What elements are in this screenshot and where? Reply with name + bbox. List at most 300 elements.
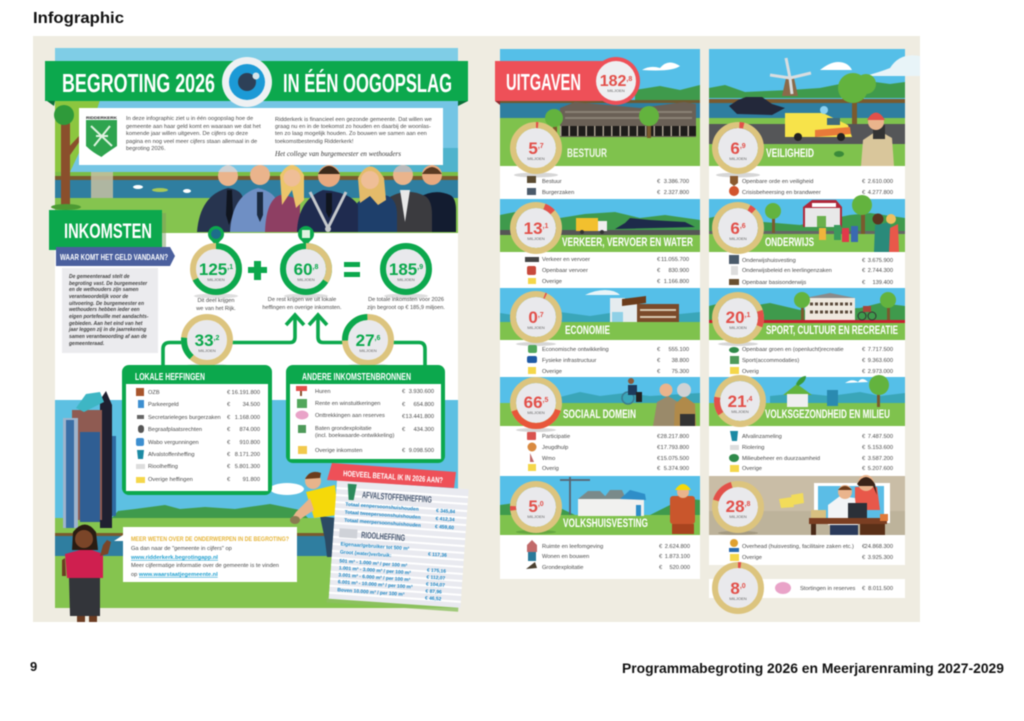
- trees: [765, 195, 872, 234]
- table rows andere inkomstenbronnen: [296, 386, 434, 454]
- panel: andere inkomstenbronnen: [286, 365, 445, 463]
- table: volksgezondheid: 5.207.600: [868, 466, 893, 472]
- donut: volkshuisvesting: MILJOEN: [527, 514, 545, 519]
- panel: sociaal domein: [500, 377, 700, 476]
- table: volkshuisvesting: Wonen en bouwen: [542, 554, 589, 560]
- table rows andere inkomstenbronnen: €: [402, 427, 406, 433]
- table rows andere inkomstenbronnen: (incl. boekwaarde-ontwikkeling): [315, 433, 394, 439]
- illustration: tower: [63, 391, 116, 528]
- panel: lokale heffingen: LOKALE HEFFINGEN: [135, 372, 205, 383]
- donut: 60,8: [283, 246, 329, 298]
- table: bestuur: €: [657, 179, 661, 185]
- subheading ribbon: [56, 247, 175, 266]
- text block: gemeenteraad: De gemeenteraad stelt de: [69, 274, 130, 280]
- table rows lokale heffingen: €: [227, 477, 231, 483]
- notepad: hoeveel betaal ik: [326, 463, 469, 612]
- notepad: hoeveel betaal ik: € 459,60: [435, 524, 454, 531]
- table rows lokale heffingen: 910.800: [239, 440, 260, 446]
- table: verkeer: €: [657, 268, 661, 274]
- donut: volksgezondheid: [717, 378, 763, 424]
- donut: verkeer: 13: [524, 219, 543, 238]
- table: verkeer: Openbaar vervoer: [542, 268, 588, 274]
- red ribbon: [327, 463, 456, 488]
- table: bestuur: Bestuur: [542, 179, 562, 185]
- donut: onderwijs: 6: [730, 219, 740, 238]
- intro text left: begroting 2026.: [126, 146, 166, 152]
- windmill: [770, 58, 811, 96]
- donut: economie: [513, 294, 559, 346]
- table: volksgezondheid: Milieubeheer en duurzaamheid: [742, 456, 820, 462]
- table: sport: €: [862, 369, 866, 375]
- table rows lokale heffingen: [136, 388, 260, 483]
- donut: 125,1: ,1: [227, 264, 233, 271]
- illustration: woman: [62, 524, 111, 622]
- callout: more information: Meer cijfermatige informatie over de gemeente is te vinden: [131, 563, 279, 569]
- table: volkshuisvesting: 2.624.800: [665, 544, 690, 550]
- table rows lokale heffingen: OZB: [148, 390, 160, 396]
- table rows lokale heffingen: Rioolheffing: [148, 464, 178, 470]
- notepad: hoeveel betaal ik: 6.001 m³ - 10.000 m³ / per 100 m³: [338, 579, 413, 591]
- text block: gemeenteraad: jaar leggen zij in de jaarrekening: [68, 327, 146, 333]
- donut: volksgezondheid: MILJOEN: [731, 409, 749, 414]
- text block: gemeenteraad: verantwoordelijk voor de: [69, 294, 128, 300]
- table: overhead: 3.925.300: [868, 555, 893, 561]
- table: verkeer: Verkeer en vervoer: [542, 257, 590, 263]
- panel: volksgezondheid en milieu: VOLKSGEZONDHEID EN MILIEU: [765, 407, 890, 421]
- table rows lokale heffingen: €: [227, 402, 231, 408]
- donut: sociaal domein: [513, 380, 559, 432]
- panel: veiligheid: VEILIGHEID: [766, 146, 814, 160]
- table rows andere inkomstenbronnen: Huren: [315, 389, 330, 395]
- table: volksgezondheid: €: [862, 456, 866, 462]
- donut: 27,6: [345, 317, 391, 368]
- caption: lokale heffingen: De rest krijgen we uit lokale: [268, 297, 336, 303]
- inkomsten banner: INKOMSTEN: [64, 220, 152, 243]
- panel: veiligheid: [709, 49, 920, 199]
- table: volksgezondheid: €: [862, 434, 866, 440]
- heading: in een oogopslag: IN ÉÉN OOGOPSLAG: [283, 68, 452, 98]
- text block: gemeenteraad: [62, 268, 158, 353]
- table: volkshuisvesting: 520.000: [669, 565, 690, 571]
- donut: veiligheid: 6: [730, 139, 740, 158]
- donut: economie: 0: [528, 308, 538, 327]
- table rows andere inkomstenbronnen: 434.300: [413, 427, 434, 433]
- notepad: hoeveel betaal ik: € 104,07: [426, 581, 445, 589]
- table: volksgezondheid: €: [862, 466, 866, 472]
- intro text right: Het college van burgemeester en wethouders: [274, 150, 401, 158]
- equals sign: [344, 262, 360, 277]
- red ribbon: HOEVEEL BETAAL IK IN 2026 AAN?: [343, 469, 443, 485]
- donut: volksgezondheid: ,4: [747, 396, 752, 403]
- table: onderwijs: 3.675.900: [868, 258, 893, 264]
- notepad: hoeveel betaal ik: 501 m³ - 1.000 m³ / per 100 m³: [339, 558, 408, 569]
- donut: 125,1: MILJOEN: [207, 277, 225, 282]
- donut: 60,8: 60: [294, 260, 313, 279]
- donut: onderwijs: [715, 205, 761, 251]
- caption: lokale heffingen: heffingen en overige inkomsten.: [262, 305, 342, 311]
- subheading ribbon: WAAR KOMT HET GELD VANDAAN?: [60, 252, 168, 262]
- plus sign: [248, 261, 267, 280]
- tree: [838, 73, 876, 124]
- text block: gemeenteraad: uitvoering. De burgemeester en: [69, 301, 144, 307]
- donut: overhead: 28: [726, 497, 745, 516]
- donut: veiligheid: ,9: [740, 143, 746, 150]
- donut: verkeer: MILJOEN: [527, 236, 545, 241]
- table rows andere inkomstenbronnen: 13.441.800: [406, 414, 434, 420]
- table: bestuur: 3.386.700: [664, 179, 689, 185]
- table: verkeer: €: [657, 257, 661, 263]
- table rows andere inkomstenbronnen: Rente en winstuitkeringen: [315, 401, 380, 407]
- table: sport: [729, 347, 893, 375]
- table: verkeer: [525, 257, 689, 285]
- table: sociaal domein: Wmo: [542, 456, 555, 462]
- ambulance: [785, 106, 852, 141]
- table: onderwijs: €: [862, 280, 866, 286]
- notepad: hoeveel betaal ik: 1.001 m³ - 3.000 m³ / per 100 m³: [339, 565, 411, 576]
- table: sociaal domein: 28.217.800: [661, 434, 689, 440]
- donut: 33,2: 33: [195, 331, 214, 350]
- notepad: hoeveel betaal ik: € 46,52: [425, 595, 442, 603]
- table rows lokale heffingen: €: [227, 427, 231, 433]
- table: sociaal domein: 17.793.800: [661, 445, 689, 451]
- table rows andere inkomstenbronnen: €: [402, 389, 406, 395]
- donut: 125,1: [193, 246, 239, 298]
- table: volksgezondheid: 3.587.200: [868, 456, 893, 462]
- intro text left: gemeente aan haar geld komt en waaraan we dat het: [126, 124, 261, 130]
- donut: 185,9: [383, 246, 429, 298]
- table rows lokale heffingen: Parkeergeld: [148, 402, 179, 408]
- donut: volksgezondheid: 21: [728, 392, 747, 411]
- panel: inkomsten left page: [51, 48, 458, 608]
- table: volksgezondheid: 5.153.600: [868, 445, 893, 451]
- intro text right: Ridderkerk is financieel een gezonde gemeente. Dat willen we: [275, 117, 432, 123]
- table: sport: Overig: [742, 369, 759, 375]
- table rows lokale heffingen: 5.801.300: [235, 464, 260, 470]
- table rows lokale heffingen: €: [227, 452, 231, 458]
- donut: stortingen: MILJOEN: [729, 596, 747, 601]
- callout: more information: op www.waarstaatjegemeente.nl: [131, 572, 218, 578]
- table: volksgezondheid: €: [862, 445, 866, 451]
- panel: volkshuisvesting: [500, 476, 700, 579]
- panel: onderwijs: ONDERWIJS: [765, 235, 814, 249]
- panel: sport, cultuur en recreatie: [709, 288, 905, 377]
- poster background: [33, 36, 920, 622]
- caption: totale inkomsten: zijn begroot op € 185,9 miljoen.: [367, 305, 445, 311]
- uitgaven banner: MILJOEN: [607, 88, 625, 93]
- table: sport: Sport(accommodaties): [742, 358, 799, 364]
- donut: sport: 20: [726, 308, 745, 327]
- pin icons: [208, 226, 314, 246]
- table: sociaal domein: [527, 432, 689, 472]
- title banner: [45, 57, 468, 107]
- callout: more information: Ga dan naar de "gemeente in cijfers" op: [131, 546, 232, 552]
- table: economie: €: [657, 347, 661, 353]
- donut: 125,1: 125: [199, 260, 227, 279]
- table: sport: 7.717.500: [868, 347, 893, 353]
- donut: sport: ,1: [745, 312, 750, 319]
- table rows andere inkomstenbronnen: €: [402, 414, 406, 420]
- donut: sociaal domein: MILJOEN: [527, 410, 545, 415]
- illustration: man: [290, 472, 338, 557]
- notepad: hoeveel betaal ik: RIOOLHEFFING: [361, 530, 405, 543]
- table: verkeer: 11.055.700: [661, 257, 689, 263]
- notepad: hoeveel betaal ik: € 112,07: [426, 574, 446, 582]
- table rows andere inkomstenbronnen: Onttrekkingen aan reserves: [315, 413, 385, 419]
- table: volkshuisvesting: 1.873.100: [665, 554, 690, 560]
- uitgaven banner: 182: [600, 73, 626, 90]
- table: overhead: 24.868.300: [865, 544, 893, 550]
- table: overhead: €: [862, 544, 866, 550]
- donut: 60,8: MILJOEN: [297, 277, 315, 282]
- table: volkshuisvesting: Ruimte en leefomgeving: [542, 544, 603, 550]
- donut: bestuur: MILJOEN: [527, 156, 545, 161]
- table: sport: 2.973.000: [868, 369, 893, 375]
- table: bestuur: 2.327.800: [664, 190, 689, 196]
- notepad: hoeveel betaal ik: € 117,36: [428, 552, 447, 559]
- panel: stortingen in reserves: Stortingen in reserves: [800, 586, 855, 592]
- donut: 33,2: [184, 317, 230, 368]
- panel: verkeer, vervoer en water: VERKEER, VERVOER EN WATER: [562, 235, 693, 249]
- donut: volkshuisvesting: ,0: [538, 501, 544, 508]
- table: overhead: Overhead (huisvesting, facilitaire zaken etc.): [742, 544, 854, 550]
- table: economie: Economische ontwikkeling: [542, 347, 609, 353]
- table rows andere inkomstenbronnen: 654.800: [413, 402, 434, 408]
- table rows lokale heffingen: €: [227, 415, 231, 421]
- donut: veiligheid: MILJOEN: [729, 156, 747, 161]
- table: onderwijs: Onderwijshuisvesting: [742, 258, 796, 264]
- icon: Ridderkerk shield: [86, 116, 118, 157]
- table: sociaal domein: Overig: [542, 466, 559, 472]
- text block: gemeenteraad: gemeenteraad.: [68, 341, 104, 347]
- table rows lokale heffingen: 874.000: [239, 427, 260, 433]
- table: veiligheid: Crisisbeheersing en brandweer: [742, 190, 821, 196]
- table: volksgezondheid: Overige: [742, 466, 762, 472]
- donut: volkshuisvesting: 5: [528, 497, 538, 516]
- donut: 27,6: 27: [356, 331, 375, 350]
- donut: 185,9: 185: [389, 260, 417, 279]
- table rows lokale heffingen: Begraafplaatsrechten: [148, 427, 202, 433]
- donut: stortingen: [715, 565, 761, 611]
- intro text right: toekomstbestendig Ridderkerk!: [275, 139, 354, 145]
- table: sport: Openbaar groen en (openlucht)recreatie: [742, 347, 844, 353]
- table: onderwijs: 139.400: [872, 280, 893, 286]
- heading: begroting 2026: BEGROTING 2026: [62, 68, 215, 98]
- table rows andere inkomstenbronnen: Baten grondexploitatie: [315, 426, 372, 432]
- school: [803, 200, 842, 227]
- table: onderwijs: [729, 255, 893, 286]
- table: onderwijs: Openbaar basisonderwijs: [742, 280, 806, 286]
- table: sport: 9.363.600: [868, 358, 893, 364]
- icon: eye: [222, 57, 272, 107]
- table: volkshuisvesting: [526, 540, 690, 571]
- boat: [729, 97, 785, 115]
- table: sport: €: [862, 347, 866, 353]
- icon: reed and swans: [91, 172, 191, 198]
- donut: 185,9: MILJOEN: [397, 277, 415, 282]
- arrows to 60,8: [163, 315, 425, 366]
- intro text right: graag nu en in de toekomst zo houden en daarbij de woonlas-: [275, 124, 431, 130]
- donut: bestuur: 5: [528, 139, 538, 158]
- notepad: hoeveel betaal ik: Groot (water)verbruik:: [340, 549, 392, 559]
- table: sociaal domein: €: [657, 445, 661, 451]
- inkomsten banner: [49, 210, 166, 250]
- table: economie: Fysieke infrastructuur: [542, 358, 596, 364]
- donut: bestuur: [513, 125, 559, 178]
- panel: bestuur: BESTUUR: [567, 146, 607, 160]
- intro text left: [126, 116, 261, 152]
- callout: more information: MEER WETEN OVER DE ONDERWERPEN IN DE BEGROTING?: [131, 536, 289, 543]
- cloud: [865, 55, 920, 76]
- text block: gemeenteraad: en de wethouders zijn samen: [69, 287, 138, 293]
- panel: bestuur: [500, 49, 700, 199]
- table: volksgezondheid: [729, 431, 893, 472]
- table: verkeer: 1.166.800: [664, 279, 689, 285]
- table: bestuur: [527, 176, 689, 196]
- notepad: hoeveel betaal ik: AFVALSTOFFENHEFFING: [362, 490, 432, 505]
- donut: 185,9: ,9: [417, 264, 423, 271]
- notepad: hoeveel betaal ik: Eigenaar/gebruiker tot 500 m³: [340, 541, 410, 552]
- callout: more information: www.ridderkerk.begrotingapp.nl: [130, 555, 218, 561]
- panel: verkeer, vervoer en water: [500, 199, 700, 288]
- table: overhead: [729, 539, 893, 561]
- notepad: hoeveel betaal ik: Totaal meerpersoonshuishouden: [344, 518, 421, 529]
- donut: volkshuisvesting: [513, 484, 559, 534]
- intro text right: [274, 117, 432, 158]
- panel: economie: ECONOMIE: [565, 323, 610, 337]
- table: veiligheid: 2.610.000: [868, 179, 893, 185]
- table rows lokale heffingen: €: [227, 390, 231, 396]
- uitgaven banner: UITGAVEN: [506, 69, 581, 95]
- table: veiligheid: Openbare orde en veiligheid: [742, 179, 813, 185]
- table: onderwijs: 2.744.300: [868, 268, 893, 274]
- donut: stortingen: 8: [730, 579, 740, 598]
- panel: volksgezondheid en milieu: [709, 375, 905, 476]
- donut: bestuur: ,7: [538, 143, 544, 150]
- text block: gemeenteraad: gebieden. Aan het eind van het: [68, 321, 143, 327]
- donut: 60,8: ,8: [313, 264, 318, 271]
- text block: gemeenteraad: begroting vast. De burgemeester: [69, 281, 148, 287]
- table: sociaal domein: Jeugdhulp: [542, 445, 568, 451]
- table: veiligheid: [729, 176, 893, 196]
- notepad: hoeveel betaal ik: Totaal eenpersoonshuishouden: [345, 502, 419, 513]
- table: economie: [527, 345, 689, 375]
- table rows andere inkomstenbronnen: 3.930.600: [409, 389, 434, 395]
- notepad: hoeveel betaal ik: € 345,84: [436, 508, 456, 515]
- donut: onderwijs: MILJOEN: [729, 236, 747, 241]
- table: sociaal domein: €: [657, 466, 661, 472]
- page number: 9: [30, 659, 37, 674]
- yellow notes: [779, 493, 804, 508]
- children and teachers: [819, 214, 899, 252]
- table rows andere inkomstenbronnen: €: [402, 402, 406, 408]
- icon: sewer: [339, 528, 358, 539]
- table: volksgezondheid: 7.487.500: [868, 434, 893, 440]
- donut: 27,6: ,6: [375, 335, 380, 342]
- table rows andere inkomstenbronnen: €: [402, 448, 406, 454]
- table: verkeer: €: [657, 279, 661, 285]
- page heading: Infographic: [33, 10, 124, 27]
- donut: overhead: MILJOEN: [729, 514, 747, 519]
- intro text right: ten zo laag mogelijk houden. Zo bouwen we samen aan een: [275, 131, 427, 137]
- donut: 33,2: MILJOEN: [198, 348, 216, 353]
- donut: verkeer: [513, 205, 559, 251]
- table: sociaal domein: Participatie: [542, 434, 570, 440]
- panel: stortingen in reserves: 8.011.500: [868, 586, 893, 592]
- table: sociaal domein: €: [657, 456, 661, 462]
- table: volkshuisvesting: €: [659, 554, 663, 560]
- panel: onderwijs: [709, 195, 905, 288]
- donut: stortingen: ,0: [740, 583, 746, 590]
- icon: left tree: [51, 100, 100, 210]
- donut: economie: MILJOEN: [527, 325, 545, 330]
- table: economie: 75.300: [672, 369, 689, 375]
- table: sport: €: [862, 358, 866, 364]
- table: economie: €: [657, 369, 661, 375]
- donut: veiligheid: [715, 125, 761, 178]
- table: veiligheid: €: [862, 190, 866, 196]
- panel: overhead: [709, 475, 905, 565]
- table: sociaal domein: €: [657, 434, 661, 440]
- donut: verkeer: ,1: [543, 223, 548, 230]
- table rows lokale heffingen: 34.500: [243, 402, 260, 408]
- table: bestuur: Burgerzaken: [542, 190, 574, 196]
- uitgaven banner: ,8: [626, 76, 632, 83]
- table: economie: 38.800: [672, 358, 689, 364]
- donut: sport: MILJOEN: [729, 325, 747, 330]
- table: onderwijs: €: [862, 258, 866, 264]
- table rows lokale heffingen: Secretarieleges burgerzaken: [148, 415, 221, 421]
- notepad: hoeveel betaal ik: Boven 10.000 m³ / per 100 m³: [337, 587, 405, 598]
- caption: rijk: we van het Rijk.: [195, 306, 236, 312]
- table: volkshuisvesting: €: [659, 544, 663, 550]
- table rows lokale heffingen: 91.800: [243, 477, 260, 483]
- intro text left: pagina en nog veel meer cijfers staan allemaal in de: [126, 139, 257, 145]
- table: sociaal domein: 5.374.900: [664, 466, 689, 472]
- table: veiligheid: 4.277.800: [868, 190, 893, 196]
- table: volksgezondheid: Afvalinzameling: [742, 434, 782, 440]
- panel: sport, cultuur en recreatie: SPORT, CULTUUR EN RECREATIE: [766, 323, 898, 337]
- table: onderwijs: Onderwijsbeleid en leerlingenzaken: [742, 268, 832, 274]
- table: volkshuisvesting: Grondexploitatie: [542, 565, 583, 571]
- table: economie: €: [657, 358, 661, 364]
- donut: sociaal domein: 66: [524, 393, 543, 412]
- donut: overhead: ,8: [745, 501, 750, 508]
- desk workers: [809, 475, 888, 535]
- table: sociaal domein: 15.075.500: [661, 456, 689, 462]
- table rows andere inkomstenbronnen: 9.098.500: [409, 448, 434, 454]
- table: bestuur: €: [657, 190, 661, 196]
- page footer: Programmabegroting 2026 en Meerjarenraming 2027-2029: [622, 661, 1004, 676]
- panel: stortingen in reserves: €: [862, 586, 866, 592]
- table: verkeer: 830.900: [668, 268, 689, 274]
- table: overhead: €: [862, 555, 866, 561]
- intro text left: In deze infographic ziet u in één oogopslag hoe de: [126, 116, 253, 122]
- table rows lokale heffingen: Overige heffingen: [148, 477, 193, 483]
- callout: more information: [114, 527, 297, 582]
- donut: economie: ,7: [538, 312, 544, 319]
- donut: onderwijs: ,6: [740, 223, 746, 230]
- caption: totale inkomsten: De totale inkomsten voor 2026: [368, 297, 444, 303]
- donut: overhead: [715, 484, 761, 535]
- intro text left: komende jaar willen uitgeven. De cijfers op deze: [126, 131, 248, 137]
- table rows lokale heffingen: €: [227, 464, 231, 470]
- notepad: hoeveel betaal ik: Totaal tweepersoonshuishouden: [345, 510, 421, 521]
- table: onderwijs: €: [862, 268, 866, 274]
- caption: rijk: Dit deel krijgen: [198, 298, 234, 304]
- table: volkshuisvesting: €: [659, 565, 663, 571]
- text block: gemeenteraad: samen verantwoording af aan de: [69, 334, 147, 340]
- icon: bin: [347, 484, 357, 500]
